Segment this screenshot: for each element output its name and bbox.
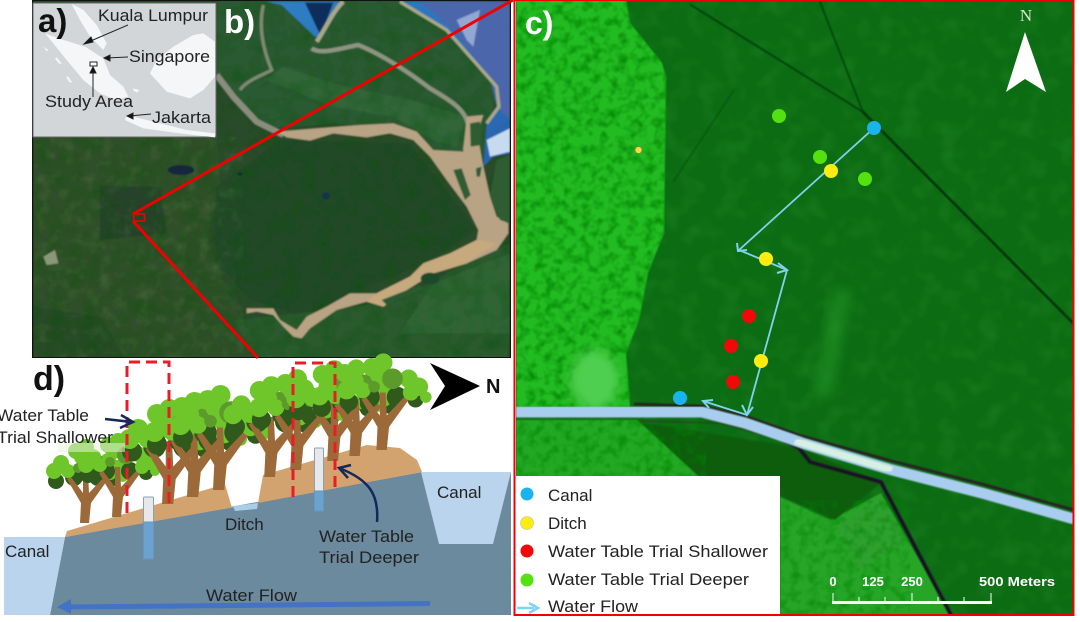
soil [65, 445, 422, 537]
dashed trial boxes [127, 362, 335, 513]
inset labels [45, 6, 212, 127]
grey river north [217, 75, 283, 135]
lower left bright [516, 420, 951, 615]
wells [144, 448, 324, 559]
labels: Trial Deeper [319, 548, 419, 567]
legend [516, 476, 780, 616]
inset labels: Singapore [129, 47, 210, 66]
town [43, 250, 58, 265]
dark lines [635, 2, 1074, 615]
legend: Canal [548, 486, 592, 505]
labels: Canal [437, 483, 481, 502]
legend: Water Flow [548, 597, 639, 616]
zoom lines [133, 0, 513, 358]
labels: Water Table [319, 527, 414, 546]
scale bar: 125 [862, 574, 884, 589]
trees [46, 353, 432, 523]
scale bar [829, 574, 1055, 604]
panel a: location inset [33, 2, 216, 137]
panel b: satellite map [32, 0, 511, 358]
panel a: location inset: a) [38, 2, 67, 39]
water flow arrows [703, 128, 874, 415]
inset labels: Study Area [45, 92, 134, 111]
lakes [168, 165, 194, 175]
panel d: cross section: d) [33, 360, 65, 398]
ditch water [233, 503, 258, 511]
north arrow d: N [486, 376, 500, 398]
north arrow c: N [1020, 6, 1032, 25]
labels: Ditch [225, 515, 264, 534]
panel c: false colour satellite image [516, 0, 1074, 615]
labels: Water Flow [206, 586, 298, 605]
inset labels: Kuala Lumpur [98, 6, 208, 25]
sample points [635, 109, 881, 405]
inset labels: Jakarta [152, 108, 212, 127]
panel c border [514, 0, 1074, 615]
labels: Canal [5, 542, 49, 561]
north arrow c [1006, 6, 1046, 92]
scale bar: 0 [829, 574, 837, 589]
label c: c) [525, 5, 553, 41]
coast strip [400, 2, 499, 123]
legend: Ditch [548, 514, 587, 533]
legend: Water Table Trial Shallower [548, 542, 768, 561]
groundwater [50, 472, 511, 615]
labels [0, 406, 481, 605]
inset arrows [84, 25, 151, 119]
canal channel [516, 412, 1074, 519]
water flow arrow [57, 599, 430, 614]
scale bar: 500 Meters [979, 574, 1055, 589]
canals [421, 472, 511, 544]
scale bar: 250 [901, 574, 923, 589]
labels: Trial Shallower [0, 428, 113, 447]
panel d: cross section [0, 353, 511, 615]
ocean [267, 2, 510, 167]
navy arrows [105, 415, 377, 522]
legend: Water Table Trial Deeper [548, 570, 749, 589]
north arrow d [430, 363, 500, 410]
pale label background [58, 443, 125, 452]
label b: b) [224, 3, 255, 40]
tan estuary [247, 115, 508, 338]
